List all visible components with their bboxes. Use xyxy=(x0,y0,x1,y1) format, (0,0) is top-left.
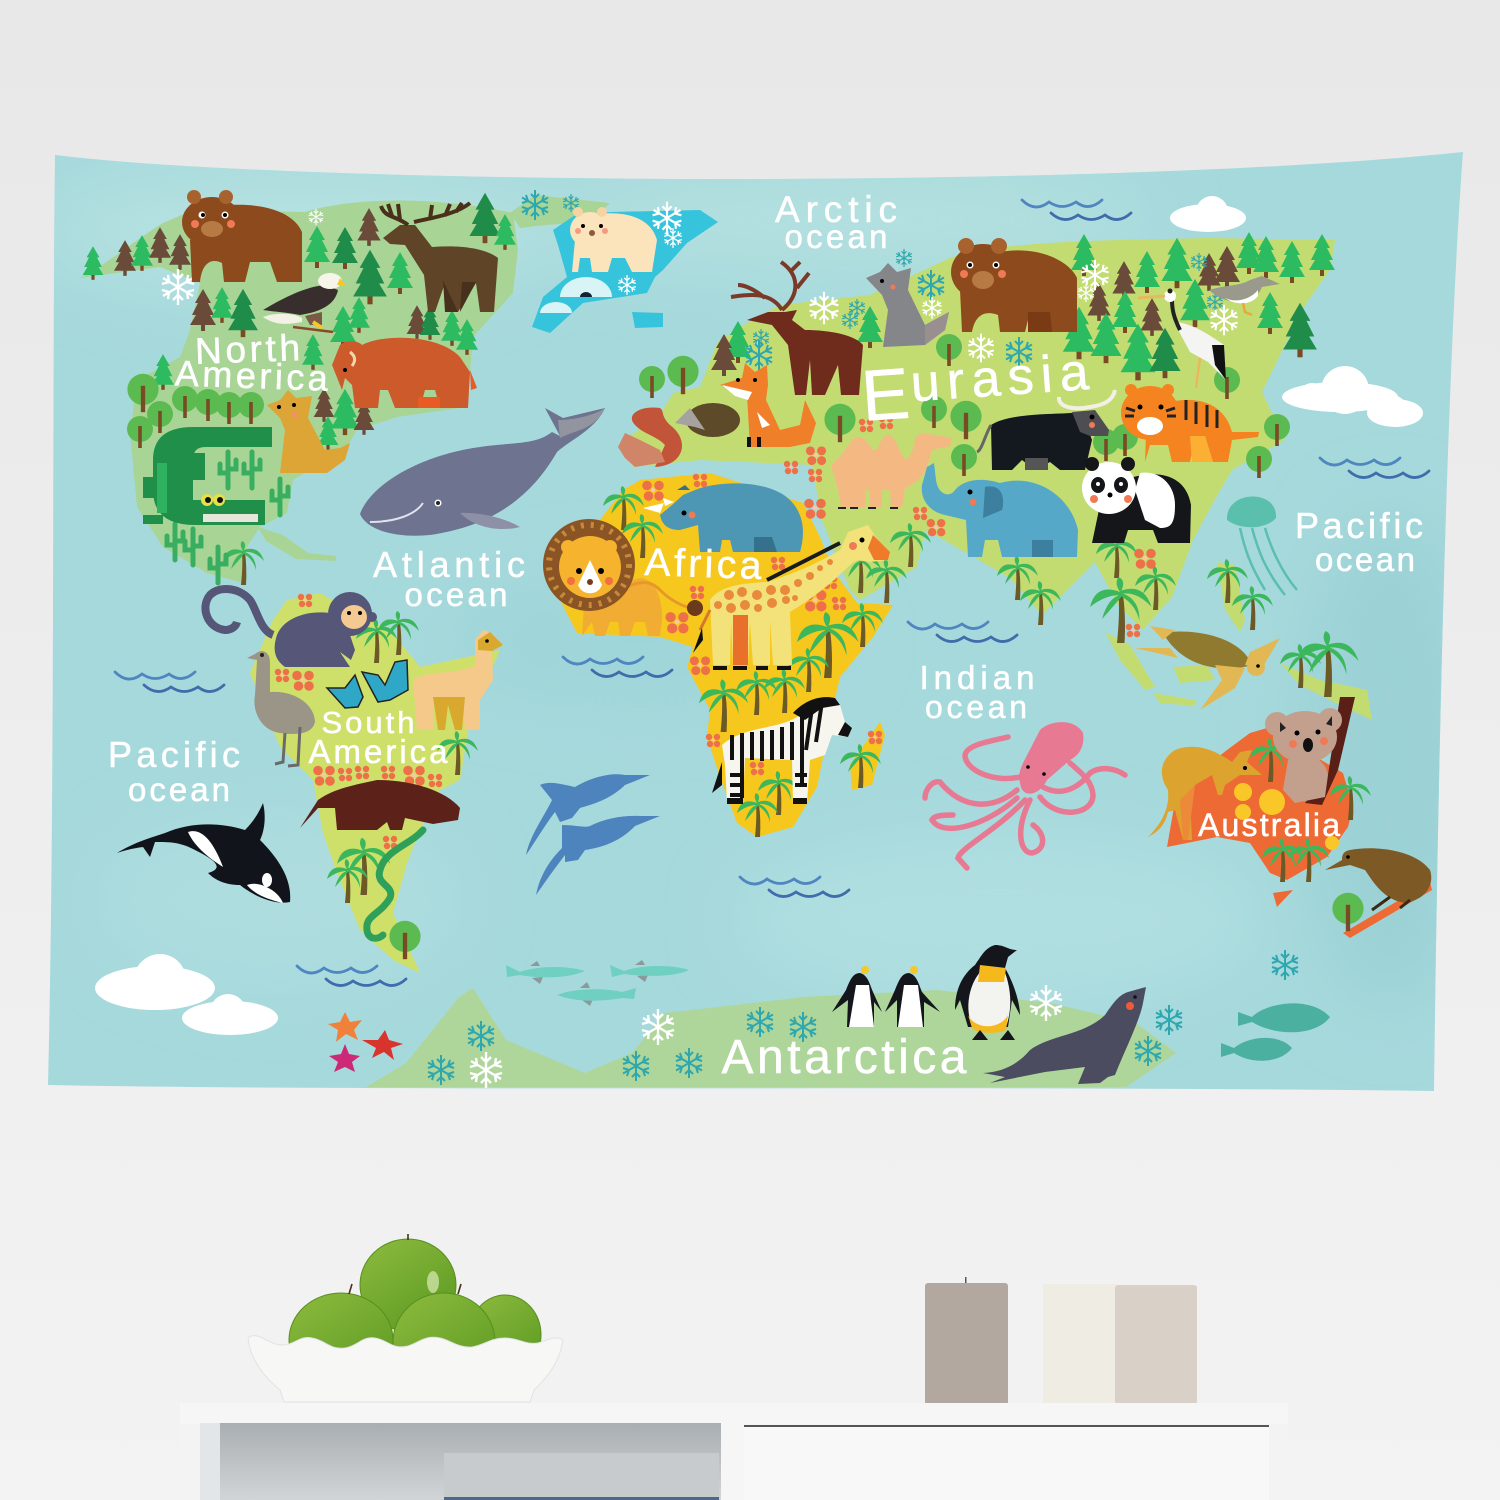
animal: emperor penguin xyxy=(955,945,1020,1040)
animal: small penguins xyxy=(832,966,940,1027)
animal: grey wolf xyxy=(866,263,949,347)
animal: bison xyxy=(332,338,477,408)
animal: anteater xyxy=(300,780,460,830)
animal: zebra xyxy=(712,697,852,804)
animal: jellyfish xyxy=(1227,496,1297,595)
label: South America: South xyxy=(322,705,414,740)
animal: octopus xyxy=(925,722,1125,868)
continent: South America xyxy=(250,593,500,973)
animal: flat fish xyxy=(1221,1003,1330,1061)
fruit bowl with green apples xyxy=(248,1234,563,1402)
animal: tiger xyxy=(1121,384,1259,462)
animal: brown bear North America xyxy=(182,190,302,282)
animal: whale xyxy=(360,408,605,536)
animal: llama xyxy=(413,630,503,730)
animal: fish school xyxy=(506,960,689,1006)
animal: polar bear xyxy=(570,207,657,272)
snowflakes xyxy=(162,190,1298,1088)
label: North America: America xyxy=(174,352,330,399)
continent: North America xyxy=(80,200,518,583)
animal: monkey xyxy=(205,589,377,667)
label: Arctic ocean: ocean xyxy=(784,218,888,255)
animal: yak xyxy=(977,390,1115,470)
label: Africa: Africa xyxy=(644,541,763,588)
continent: Southeast Asian islands xyxy=(1105,562,1372,720)
label: Eurasia xyxy=(859,341,1092,437)
label: Pacific ocean west: ocean xyxy=(128,771,230,808)
animal: lion xyxy=(543,519,703,636)
animal: brown bear Eurasia xyxy=(951,238,1077,332)
label: South America: America xyxy=(308,733,448,770)
clouds xyxy=(95,196,1423,1035)
label: South America xyxy=(308,705,448,770)
label: Eurasia: E xyxy=(859,354,912,437)
white console cabinet xyxy=(180,1403,1288,1500)
label: Indian ocean: Indian xyxy=(920,659,1034,696)
fabric shading xyxy=(40,170,1480,1010)
label: Pacific ocean east: ocean xyxy=(1315,541,1415,578)
animal: moose xyxy=(381,203,498,312)
icon: igloos xyxy=(540,277,612,313)
continent: Tasmania and New Zealand xyxy=(1273,882,1432,938)
continent: Greenland xyxy=(532,210,718,333)
label: Pacific ocean east xyxy=(1295,505,1423,578)
candle: cream xyxy=(1043,1284,1118,1405)
animal: sea turtle xyxy=(1135,626,1280,710)
label: Atlantic ocean: Atlantic xyxy=(373,544,525,585)
animal: squirrel xyxy=(618,407,682,467)
animal: giraffe xyxy=(693,525,890,668)
animal: cougar xyxy=(267,390,350,473)
animal: hedgehog xyxy=(675,403,740,437)
continent: Madagascar xyxy=(850,722,885,790)
continent: Africa xyxy=(560,473,893,837)
label: Atlantic ocean xyxy=(373,544,525,613)
animal: camel xyxy=(831,433,952,508)
label: North America: North xyxy=(194,327,301,372)
animal: fox xyxy=(720,363,816,447)
icon: yellow flowers Australia xyxy=(1234,783,1339,850)
animal: bald eagle xyxy=(263,273,346,332)
continent: Antarctica xyxy=(366,988,1176,1087)
animal: snake xyxy=(367,830,423,938)
label: Indian ocean xyxy=(920,659,1034,725)
continent: Caribbean islands xyxy=(258,527,336,561)
label: Pacific ocean west: Pacific xyxy=(108,734,240,775)
animal: panda xyxy=(1082,457,1191,543)
flowers xyxy=(275,416,1156,849)
animal: orca xyxy=(117,803,290,903)
label: Atlantic ocean: ocean xyxy=(404,576,508,613)
label: Arctic ocean xyxy=(775,189,897,255)
waves xyxy=(115,200,1429,986)
label: Indian ocean: ocean xyxy=(925,689,1027,725)
label: Australia: Australia xyxy=(1198,807,1340,843)
animal: small bird xyxy=(1209,276,1280,315)
continent: Australia xyxy=(1167,728,1353,880)
label: Antarctica: Antarctica xyxy=(722,1031,967,1084)
animal: kangaroo xyxy=(1148,747,1262,840)
animal: crane xyxy=(1138,288,1226,388)
trees and forests xyxy=(83,193,1371,959)
label: North America xyxy=(174,327,330,399)
animal: reindeer xyxy=(731,262,863,395)
animal: rhino xyxy=(643,483,803,552)
animal: kiwi xyxy=(1325,848,1431,910)
tapestry fabric xyxy=(48,152,1463,1091)
animal: rhea xyxy=(247,651,315,766)
animal: starfish xyxy=(328,1012,403,1072)
animal: dolphins xyxy=(526,774,660,895)
label: Eurasia: urasia xyxy=(909,343,1090,413)
animal: butterflies xyxy=(327,660,408,708)
continent: Arctic islands xyxy=(510,195,610,228)
animal: crocodile xyxy=(143,427,272,525)
animal: koala with tree xyxy=(1265,697,1355,805)
animal: seal xyxy=(983,987,1146,1084)
animal: elephant xyxy=(922,463,1078,557)
continent: Eurasia xyxy=(625,238,1335,630)
candle: grey-brown xyxy=(925,1277,1008,1405)
label: Arctic ocean: Arctic xyxy=(775,189,897,230)
label: Pacific ocean east: Pacific xyxy=(1295,505,1423,546)
label: Pacific ocean west xyxy=(108,734,240,808)
candle: tan xyxy=(1115,1285,1197,1405)
